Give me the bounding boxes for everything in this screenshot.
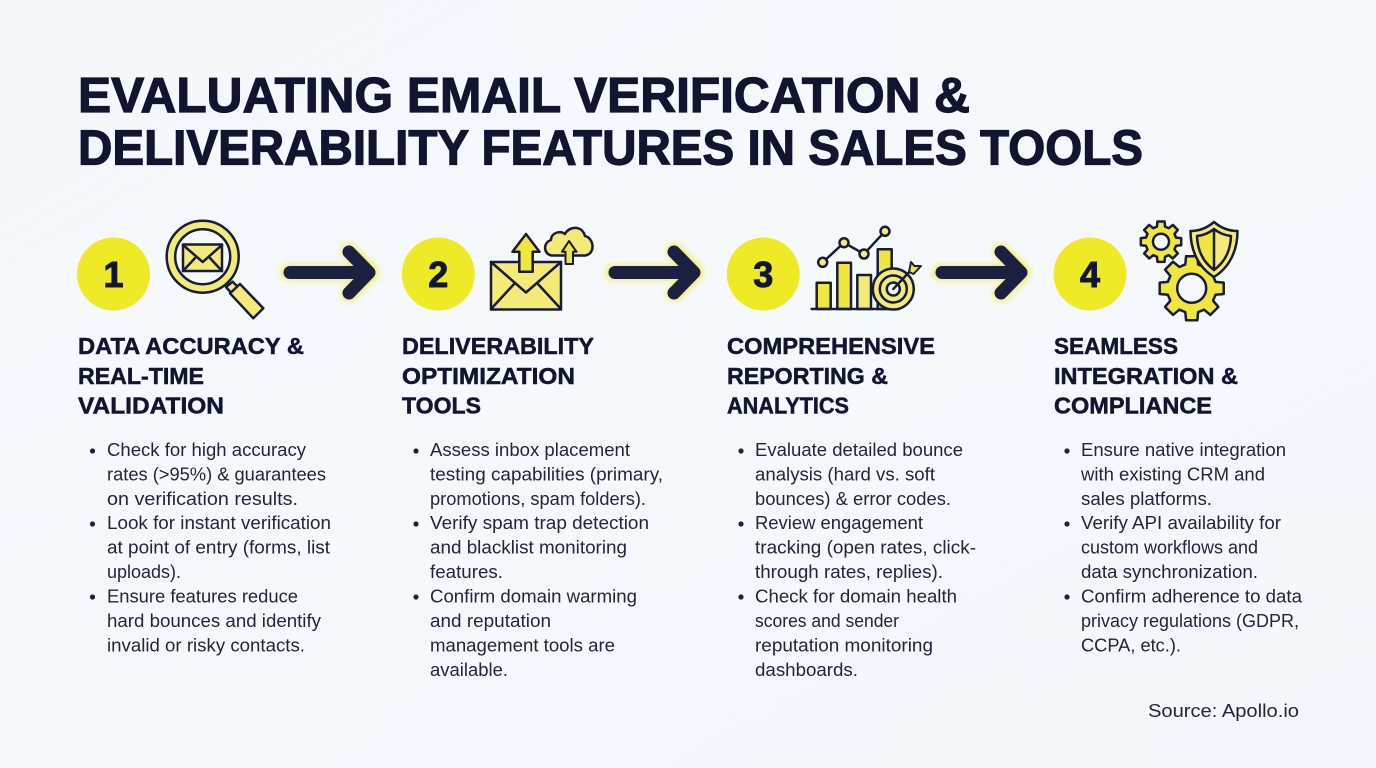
heading: REPORTING & xyxy=(727,363,888,389)
bullet list: dashboards. xyxy=(755,660,858,680)
heading: COMPLIANCE xyxy=(1054,392,1212,418)
bullet list: features. xyxy=(430,562,503,582)
heading xyxy=(1054,333,1238,418)
heading: INTEGRATION & xyxy=(1054,363,1238,389)
bullet list: reputation monitoring xyxy=(755,636,933,656)
bullet list: promotions, spam folders). xyxy=(430,489,646,509)
bullet list: rates (>95%) & guarantees xyxy=(107,464,326,484)
number badge 4: 4 xyxy=(1080,254,1100,295)
bullet list: and reputation xyxy=(430,611,551,631)
bullet list: with existing CRM and xyxy=(1080,464,1265,484)
panel: step 4 integration xyxy=(1054,222,1303,655)
bullet list xyxy=(738,440,976,680)
bullet list: scores and sender xyxy=(755,611,899,631)
heading: COMPREHENSIVE xyxy=(727,333,935,359)
bullet list: Verify spam trap detection xyxy=(430,513,649,533)
title: EVALUATING EMAIL VERIFICATION & xyxy=(78,69,970,123)
bullet list: uploads). xyxy=(107,562,181,582)
bullet list: available. xyxy=(430,660,508,680)
bullet list: Check for domain health xyxy=(755,586,957,606)
bullet list: Ensure native integration xyxy=(1081,440,1286,460)
bullet list: Confirm adherence to data xyxy=(1081,586,1303,606)
bullet list xyxy=(413,440,663,680)
bullet list: bounces) & error codes. xyxy=(755,489,951,509)
panel: step 3 reporting xyxy=(727,227,976,680)
panel: step 2 deliverability xyxy=(402,228,663,680)
title xyxy=(78,69,1143,176)
heading: TOOLS xyxy=(402,392,481,418)
heading xyxy=(727,333,935,418)
bullet list: on verification results. xyxy=(107,489,298,509)
arrow 2 to 3 xyxy=(613,251,696,294)
arrow 1 to 2 xyxy=(288,251,371,294)
icon: gears and shield xyxy=(1141,222,1238,320)
bullet list: management tools are xyxy=(430,636,615,656)
bullet list: Evaluate detailed bounce xyxy=(755,440,963,460)
number badge 2 xyxy=(402,238,475,310)
number badge 1 xyxy=(77,238,150,310)
bullet list: Review engagement xyxy=(755,513,923,533)
bullet list: Look for instant verification xyxy=(107,513,331,533)
bullet list: invalid or risky contacts. xyxy=(107,636,305,656)
bullet list xyxy=(1064,440,1303,656)
bullet list: hard bounces and identify xyxy=(107,611,322,631)
icon: envelope with upload arrows and cloud xyxy=(491,228,593,310)
source note: Source: Apollo.io xyxy=(1148,701,1299,721)
bullet list: Assess inbox placement xyxy=(430,440,630,460)
bullet list: through rates, replies). xyxy=(755,562,943,582)
bullet list xyxy=(90,440,331,656)
title: DELIVERABILITY FEATURES IN SALES TOOLS xyxy=(78,122,1143,176)
number badge 4 xyxy=(1054,238,1126,310)
heading: VALIDATION xyxy=(78,392,224,418)
arrow 3 to 4 xyxy=(940,251,1023,294)
heading: REAL-TIME xyxy=(78,363,204,389)
bullet list: sales platforms. xyxy=(1081,489,1212,509)
bullet list: Verify API availability for xyxy=(1081,513,1281,533)
icon: magnifying glass with envelope xyxy=(167,221,263,318)
bullet list: custom workflows and xyxy=(1081,538,1258,558)
bullet list: Check for high accuracy xyxy=(107,440,307,460)
bullet list: testing capabilities (primary, xyxy=(430,464,663,484)
number badge 1: 1 xyxy=(103,254,124,295)
bullet list: analysis (hard vs. soft xyxy=(755,464,935,484)
heading xyxy=(402,333,594,418)
bullet list: Confirm domain warming xyxy=(430,586,637,606)
heading: DELIVERABILITY xyxy=(402,333,594,359)
bullet list: tracking (open rates, click- xyxy=(755,538,976,558)
heading: SEAMLESS xyxy=(1054,333,1178,359)
number badge 3 xyxy=(727,238,800,310)
heading: DATA ACCURACY & xyxy=(78,333,304,359)
panel: step 1 data accuracy xyxy=(77,221,331,656)
bullet list: Ensure features reduce xyxy=(107,586,298,606)
bullet list: privacy regulations (GDPR, xyxy=(1081,611,1299,631)
icon: bar chart with trend line and target xyxy=(812,227,921,310)
heading: OPTIMIZATION xyxy=(402,363,575,389)
bullet list: and blacklist monitoring xyxy=(430,538,627,558)
bullet list: data synchronization. xyxy=(1081,562,1258,582)
bullet list: at point of entry (forms, list xyxy=(107,538,330,558)
heading xyxy=(78,333,304,418)
heading: ANALYTICS xyxy=(727,392,849,418)
number badge 2: 2 xyxy=(428,254,448,295)
number badge 3: 3 xyxy=(753,254,773,295)
bullet list: CCPA, etc.). xyxy=(1081,636,1181,656)
